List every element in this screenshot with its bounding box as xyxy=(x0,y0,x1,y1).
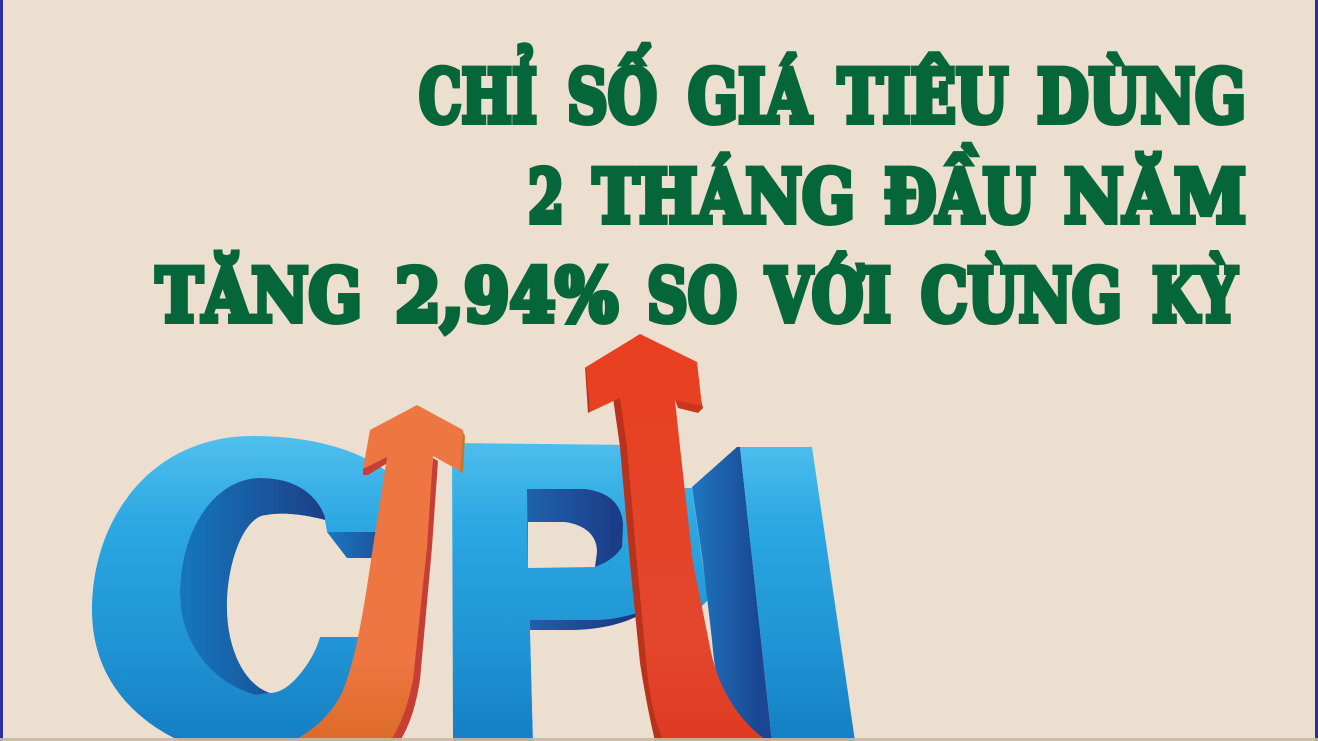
left border line xyxy=(0,0,3,741)
title: SO xyxy=(647,253,737,339)
bottom edge strip xyxy=(0,738,1318,741)
letter P xyxy=(452,443,708,741)
letter I xyxy=(692,447,855,741)
title: 2 xyxy=(528,154,564,240)
title: ĐẦU xyxy=(884,145,1035,240)
title: KỲ xyxy=(1152,253,1238,339)
title: CHỈ xyxy=(419,45,537,140)
title: GIÁ xyxy=(688,54,812,140)
right border line xyxy=(1315,0,1318,741)
title: TIÊU xyxy=(838,54,1008,140)
red arrow xyxy=(585,334,768,741)
title: TĂNG xyxy=(156,252,362,339)
orange arrow xyxy=(293,405,465,741)
title: DÙNG xyxy=(1037,54,1246,140)
title: VỚI xyxy=(765,252,891,339)
title xyxy=(156,45,1246,339)
title: NĂM xyxy=(1064,153,1246,240)
letter C xyxy=(92,436,385,741)
title: THÁNG xyxy=(593,154,855,240)
title: CÙNG xyxy=(921,253,1122,339)
title: 2,94% xyxy=(395,253,618,339)
title: SỐ xyxy=(567,45,657,140)
CPI graphic xyxy=(92,334,855,741)
